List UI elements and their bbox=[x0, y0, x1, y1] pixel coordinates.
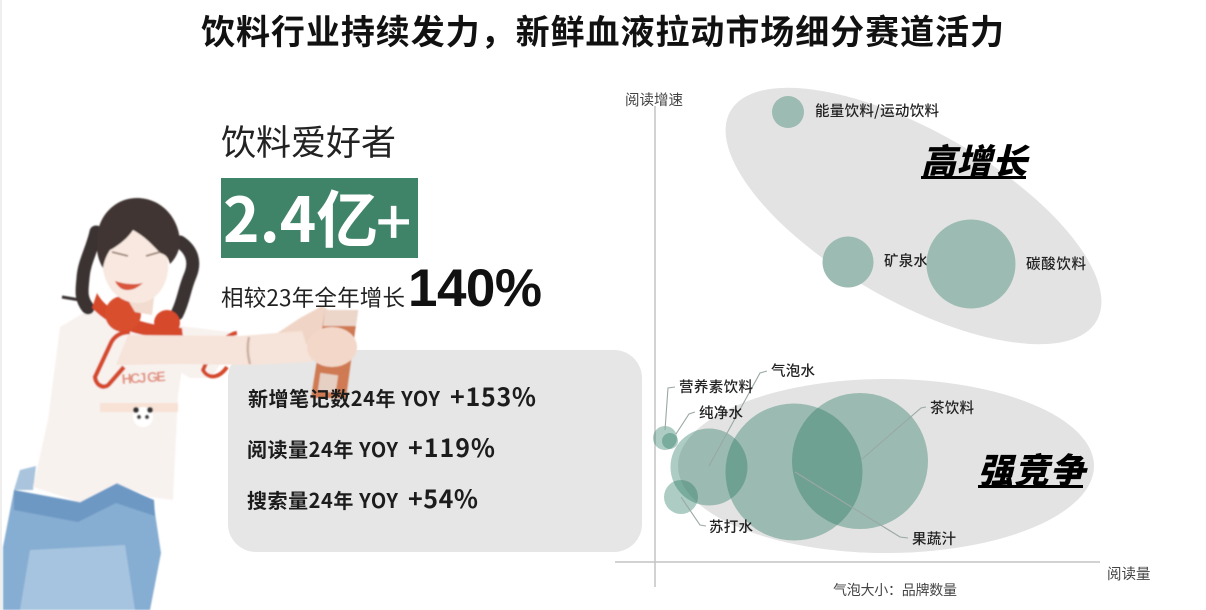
face bbox=[102, 228, 168, 303]
bubble: mineral water: 矿泉水 bbox=[884, 250, 928, 271]
growth statement: 140% bbox=[408, 259, 542, 318]
metric: reads: 阅读量24年 YOY bbox=[247, 434, 398, 463]
shirt print bbox=[100, 368, 178, 427]
stat badge: 2.4亿+: 2.4亿 bbox=[223, 170, 378, 260]
leader line: nutrition drinks bbox=[665, 387, 675, 430]
leader line: soda water bbox=[681, 497, 706, 526]
bracelet bbox=[248, 337, 250, 364]
heading: beverage fans: 饮料爱好者 bbox=[221, 115, 396, 166]
tag: strong competition: 强竞争 bbox=[978, 443, 1088, 494]
metric: reads bbox=[247, 429, 495, 465]
metric: searches bbox=[247, 480, 478, 516]
label: tea: 茶饮料 bbox=[930, 397, 974, 418]
bubble: juice bbox=[726, 404, 862, 540]
metric: new notes: 新增笔记数24年 YOY bbox=[248, 383, 440, 412]
neck bbox=[122, 290, 155, 315]
label: nutrition drinks: 营养素饮料 bbox=[679, 376, 754, 397]
x axis label: 阅读量 bbox=[1107, 563, 1150, 584]
chart: bubble matrix bbox=[615, 37, 1150, 600]
leader line: tea bbox=[862, 407, 926, 459]
bubble: nutrition drinks bbox=[653, 426, 677, 450]
jeans bbox=[3, 483, 161, 610]
zone: high growth bbox=[688, 37, 1139, 395]
leader line: purified water bbox=[676, 412, 695, 434]
far sleeve bbox=[180, 326, 238, 378]
tag: high growth: 高增长 bbox=[921, 134, 1030, 185]
bottle bbox=[311, 310, 358, 398]
right braid bbox=[177, 242, 193, 314]
closed eyes bbox=[112, 252, 160, 256]
leader line: sparkling water bbox=[709, 371, 767, 466]
t-shirt bbox=[33, 308, 186, 502]
bubble: soda water bbox=[664, 480, 698, 514]
leader line: juice bbox=[795, 472, 908, 538]
bubble: carbonated drinks: 碳酸饮料 bbox=[1026, 253, 1086, 274]
bubble: carbonated drinks bbox=[926, 220, 1086, 308]
yoy metrics bbox=[247, 378, 536, 516]
metric: searches: +54% bbox=[408, 480, 478, 516]
panel: yoy metrics background bbox=[228, 350, 642, 552]
bubble: purified water bbox=[662, 433, 678, 449]
label: juice: 果蔬汁 bbox=[912, 528, 956, 549]
growth statement: 相较23年全年增长 bbox=[221, 281, 405, 313]
smile bbox=[115, 281, 143, 290]
bubble: tea bbox=[792, 393, 928, 529]
bubble: energy drinks bbox=[772, 96, 940, 128]
bubble: sparkling water bbox=[670, 428, 748, 506]
x axis bbox=[615, 561, 1100, 563]
label: sparkling water: 气泡水 bbox=[771, 360, 816, 381]
title: 饮料行业持续发力，新鲜血液拉动市场细分赛道活力 bbox=[201, 5, 1004, 54]
headphones bbox=[92, 293, 183, 338]
growth statement bbox=[221, 259, 542, 318]
left braid bbox=[62, 232, 96, 308]
hair with bangs bbox=[97, 198, 180, 268]
near arm bbox=[116, 331, 312, 365]
label: purified water: 纯净水 bbox=[699, 402, 744, 423]
metric: searches: 搜索量24年 YOY bbox=[247, 485, 398, 514]
y axis label: 阅读增速 bbox=[625, 89, 683, 110]
hand bbox=[307, 327, 357, 367]
label: soda water: 苏打水 bbox=[709, 516, 754, 537]
shirt print: HCJ GE bbox=[121, 368, 166, 387]
metric: new notes bbox=[248, 378, 536, 414]
near sleeve bbox=[95, 332, 130, 387]
y axis bbox=[654, 106, 656, 587]
bubble: mineral water bbox=[822, 236, 928, 288]
zone: strong competition bbox=[678, 379, 1094, 553]
far forearm bbox=[276, 306, 345, 345]
metric: reads: +119% bbox=[408, 429, 495, 465]
bubble size note: 气泡大小：品牌数量 bbox=[833, 580, 957, 600]
metric: new notes: +153% bbox=[450, 378, 536, 414]
illustration: girl holding a drink bbox=[3, 198, 358, 610]
stat badge: 2.4亿+: + bbox=[376, 173, 411, 263]
bubble: energy drinks: 能量饮料/运动饮料 bbox=[815, 100, 940, 121]
